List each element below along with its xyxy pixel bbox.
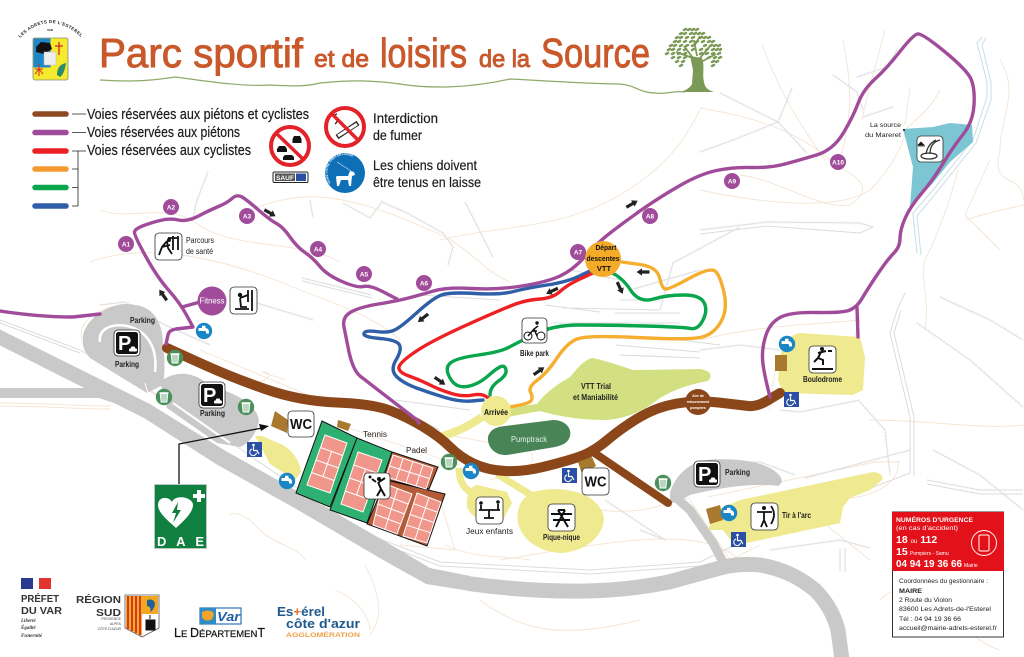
- emergency box: 15: [896, 546, 908, 558]
- icon: source and label: du Mareret: [865, 132, 901, 139]
- legend: [35, 107, 309, 206]
- icon: WC east: [582, 468, 609, 495]
- emergency box: (en cas d'accident): [896, 525, 958, 532]
- logo: region Sud: CÔTE D'AZUR: [98, 626, 121, 631]
- stage badges A1 to A10: [118, 154, 846, 291]
- logo: region Sud: SUD: [96, 607, 121, 619]
- tennis and padel courts: [296, 421, 445, 546]
- pumptrack: [488, 420, 570, 455]
- icon: boulodrome: [803, 346, 842, 384]
- source water area: [903, 123, 973, 207]
- service icons: taps, bins and accessibility: [156, 323, 799, 547]
- red trail: [399, 273, 593, 398]
- no smoking text: Interdiction: [373, 110, 438, 126]
- icon: fitness: [230, 287, 257, 314]
- west access road: [0, 393, 135, 405]
- icon: children play: Jeux enfants: [466, 527, 513, 536]
- cycling trails: [364, 262, 725, 407]
- upper parking: [83, 304, 164, 393]
- building roofs: [271, 355, 787, 524]
- icon: bike park: [520, 318, 549, 358]
- green trail: [447, 273, 706, 395]
- municipal logo: [18, 20, 82, 80]
- icon: archery: [751, 503, 811, 530]
- title: [99, 30, 650, 76]
- icon: bike park: Bike park: [520, 349, 549, 358]
- pedestrian trails (purple): [0, 34, 974, 423]
- start of MTB descents: VTT: [597, 264, 611, 273]
- arrival: [481, 396, 511, 426]
- logo: Esterel cote d'azur: Es+érel: [277, 604, 325, 619]
- lower parking: [160, 374, 259, 447]
- pumptrack: Pumptrack: [511, 435, 548, 444]
- logo: prefet du Var: Fraternité: [21, 634, 43, 639]
- emergency box: [892, 512, 1004, 637]
- fitness badge: Fitness: [200, 296, 224, 306]
- icon: WC west: WC: [290, 417, 312, 433]
- stage badges A1 to A10: A8: [646, 214, 655, 220]
- logo: prefet du Var: DU VAR: [21, 605, 62, 617]
- logo: departement du Var: [174, 608, 265, 640]
- emergency box: accueil@mairie-adrets-esterel.fr: [899, 625, 998, 632]
- parking access road: [674, 496, 727, 570]
- logo: prefet du Var: PRÉFET: [21, 592, 60, 605]
- DAE defibrillator sign and pointer: DAE: [157, 534, 204, 549]
- parking label top: Parking: [130, 316, 155, 325]
- parking icon and label 1: [114, 330, 140, 369]
- parking icon and label 2: Parking: [200, 409, 225, 418]
- parking icon and label 1: Parking: [115, 360, 139, 369]
- fire turnaround area: [685, 389, 711, 415]
- parking icon and label 2: P: [203, 385, 216, 407]
- title: Source: [541, 30, 650, 76]
- dogs on leash text: [373, 157, 481, 190]
- emergency box: MAIRE: [899, 588, 922, 595]
- legend: Voies réservées aux cyclistes: [87, 143, 251, 159]
- logo: prefet du Var: Liberté: [20, 619, 36, 624]
- yellow zones: [255, 333, 882, 553]
- title: Parc sportif: [99, 30, 304, 76]
- stage badges A1 to A10: A1: [122, 242, 131, 248]
- stage badges A1 to A10: A10: [832, 160, 844, 166]
- parking icon and label 2: [199, 382, 225, 418]
- parking icon and label 3: Parking: [725, 468, 750, 477]
- title: de la: [479, 46, 531, 73]
- legend: Voies réservées aux piétons: [87, 125, 240, 141]
- sign: dogs on leash: TENEZ VOTRE CHIEN EN LAISSE: [326, 153, 354, 184]
- sign: no vehicles except disabled: SAUF: [276, 175, 294, 182]
- no smoking text: de fumer: [373, 127, 422, 143]
- icon: WC west: [288, 411, 314, 437]
- parking icon and label 3: [694, 461, 750, 487]
- parking icon and label 3: P: [698, 464, 711, 486]
- logo: prefet du Var: [20, 578, 62, 639]
- fire turnaround area: Aire de: [692, 394, 704, 398]
- title underline: [100, 77, 685, 93]
- tennis and padel icon and labels: Tennis: [363, 430, 387, 439]
- logo: Esterel cote d'azur: AGGLOMÉRATION: [286, 630, 360, 639]
- emergency box: Coordonnées du gestionnaire :: [899, 578, 988, 585]
- emergency box: 04 94 19 36 66: [896, 558, 962, 570]
- logo: region Sud: ALPES: [110, 622, 122, 626]
- title: loisirs: [380, 30, 467, 76]
- sign: dogs on leash: [325, 153, 365, 193]
- logo: Esterel cote d'azur: côte d'azur: [286, 617, 360, 631]
- logo: region Sud: [76, 593, 159, 637]
- logo: region Sud: RÉGION: [76, 593, 121, 606]
- grey roads and parking areas: [0, 304, 842, 657]
- icon: parcours de sante: Parcours: [186, 236, 214, 245]
- logo: prefet du Var: Égalité: [20, 625, 37, 631]
- icon: children play: [466, 497, 513, 536]
- fire turnaround area: pompiers: [690, 406, 706, 410]
- stage badges A1 to A10: A5: [360, 272, 369, 278]
- emergency box: Tél : 04 94 19 36 66: [899, 616, 961, 623]
- icon: WC east: WC: [584, 474, 607, 490]
- olive tree: [666, 29, 721, 92]
- direction arrows: [156, 198, 649, 388]
- icon: boulodrome: Boulodrome: [803, 375, 842, 384]
- right parking: [670, 459, 782, 503]
- VTT trial label: et Maniabilité: [573, 393, 618, 402]
- start of MTB descents: descentes: [586, 254, 620, 263]
- icon: picnic: Pique-nique: [543, 533, 580, 542]
- icon: picnic: [543, 504, 580, 542]
- emergency box: NUMÉROS D'URGENCE: [896, 515, 974, 524]
- icon: source and label: [865, 122, 943, 162]
- municipal logo: VAR: [47, 28, 54, 32]
- legend colour bars: [35, 114, 66, 206]
- stage badges A1 to A10: A3: [243, 214, 252, 220]
- legend: Voies réservées aux piétons et cyclistes: [87, 107, 309, 123]
- fire turnaround area: retournement: [687, 400, 710, 404]
- DAE defibrillator sign and pointer: [154, 424, 269, 549]
- stage badges A1 to A10: A7: [574, 250, 583, 256]
- dogs on leash text: être tenus en laisse: [373, 174, 481, 190]
- arrival: Arrivée: [484, 408, 508, 417]
- start of MTB descents: [585, 241, 621, 277]
- logo: Esterel cote d'azur: [277, 604, 360, 639]
- VTT trial zone: [507, 358, 711, 420]
- stage badges A1 to A10: A6: [420, 280, 429, 288]
- tennis and padel icon and labels: [363, 430, 427, 499]
- sign: no smoking: [326, 108, 364, 146]
- stage badges A1 to A10: A2: [167, 204, 176, 212]
- tennis and padel icon and labels: Padel: [406, 446, 427, 455]
- main road west section: [0, 327, 470, 591]
- VTT trial label: VTT Trial: [581, 382, 611, 391]
- parking icon and label 1: P: [118, 333, 131, 355]
- emergency box: 2 Route du Violon: [899, 597, 952, 604]
- emergency box: 83600 Les Adrets-de-l'Esterel: [899, 606, 991, 613]
- hachured grey terrain lines: [0, 50, 1023, 574]
- no smoking text: [373, 110, 438, 143]
- sign: no vehicles except disabled: [271, 127, 309, 182]
- municipal logo: LES ADRETS DE L'ESTEREL: [18, 20, 82, 38]
- icon: phone: [972, 530, 996, 556]
- icon: parcours de sante: de santé: [186, 247, 213, 256]
- logo: departement du Var: LE DÉPARTEMENT: [174, 626, 265, 640]
- main road central section: [468, 568, 720, 591]
- logo: departement du Var: Var: [217, 609, 241, 624]
- logo: region Sud: PROVENCE: [101, 617, 122, 621]
- icon: parcours de sante: [155, 233, 214, 260]
- dogs on leash text: Les chiens doivent: [373, 157, 477, 173]
- emergency box: Pompiers - Samu: [910, 551, 949, 557]
- emergency box: Mairie: [964, 563, 978, 569]
- orange trail: [510, 262, 725, 407]
- blue trail: [364, 270, 592, 401]
- stage badges A1 to A10: A4: [314, 246, 323, 254]
- fitness badge: [198, 286, 226, 316]
- stage badges A1 to A10: A9: [728, 178, 737, 186]
- title: et de: [314, 46, 369, 73]
- icon: archery: Tir à l'arc: [782, 511, 811, 520]
- icon: source and label: La source: [870, 122, 901, 129]
- VTT trial label: [573, 382, 618, 402]
- main road east section: [720, 564, 842, 657]
- emergency box: 18 ou 112: [896, 534, 937, 546]
- start of MTB descents: Départ: [596, 243, 617, 252]
- pedestrian and cyclist trail (brown): [167, 348, 780, 503]
